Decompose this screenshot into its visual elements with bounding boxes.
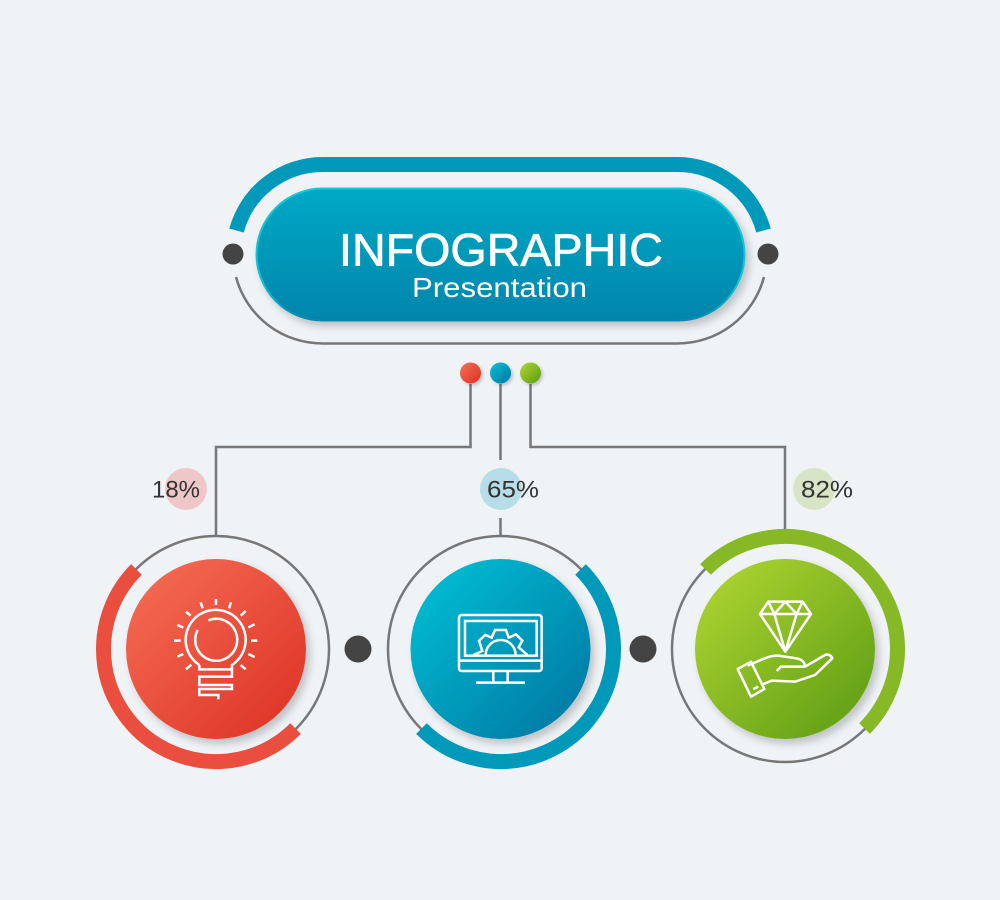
title: INFOGRAPHIC bbox=[339, 224, 663, 276]
gray arc below header bbox=[236, 277, 764, 344]
percent: 65% bbox=[480, 468, 539, 510]
gray ring bbox=[388, 536, 614, 762]
green progress arc bbox=[705, 536, 898, 729]
icon: monitor with gear bbox=[459, 615, 542, 683]
green connector dot bbox=[520, 362, 541, 384]
subtitle: Presentation bbox=[412, 272, 587, 303]
icon: light bulb bbox=[174, 599, 257, 699]
percent: 65%: 65% bbox=[487, 476, 539, 504]
connector lines bbox=[216, 384, 785, 536]
panel: blue 65% circle bbox=[388, 536, 614, 762]
green disk bbox=[695, 559, 875, 739]
gray ring bbox=[672, 536, 898, 762]
icon: diamond over hand bbox=[738, 602, 832, 697]
left header dot bbox=[222, 244, 244, 264]
red disk bbox=[126, 559, 306, 739]
blue disk bbox=[410, 559, 590, 739]
percent: 82% bbox=[793, 468, 853, 510]
right header dot bbox=[758, 244, 778, 264]
panel: red 18% circle bbox=[103, 536, 329, 762]
red connector dot bbox=[460, 362, 481, 384]
red progress arc bbox=[103, 569, 296, 762]
blue progress arc bbox=[421, 569, 614, 762]
dark dot between red and blue bbox=[344, 636, 372, 662]
percent: 82%: 82% bbox=[801, 476, 853, 504]
panel: green 82% circle bbox=[672, 536, 898, 762]
dark dot between blue and green bbox=[630, 636, 656, 662]
percent: 18%: 18% bbox=[152, 476, 200, 504]
title pill bbox=[256, 188, 744, 320]
teal arc above header bbox=[236, 164, 764, 230]
gray ring bbox=[103, 536, 329, 762]
header panel bbox=[222, 164, 778, 344]
percent: 18% bbox=[152, 468, 207, 510]
blue connector dot bbox=[490, 362, 511, 384]
